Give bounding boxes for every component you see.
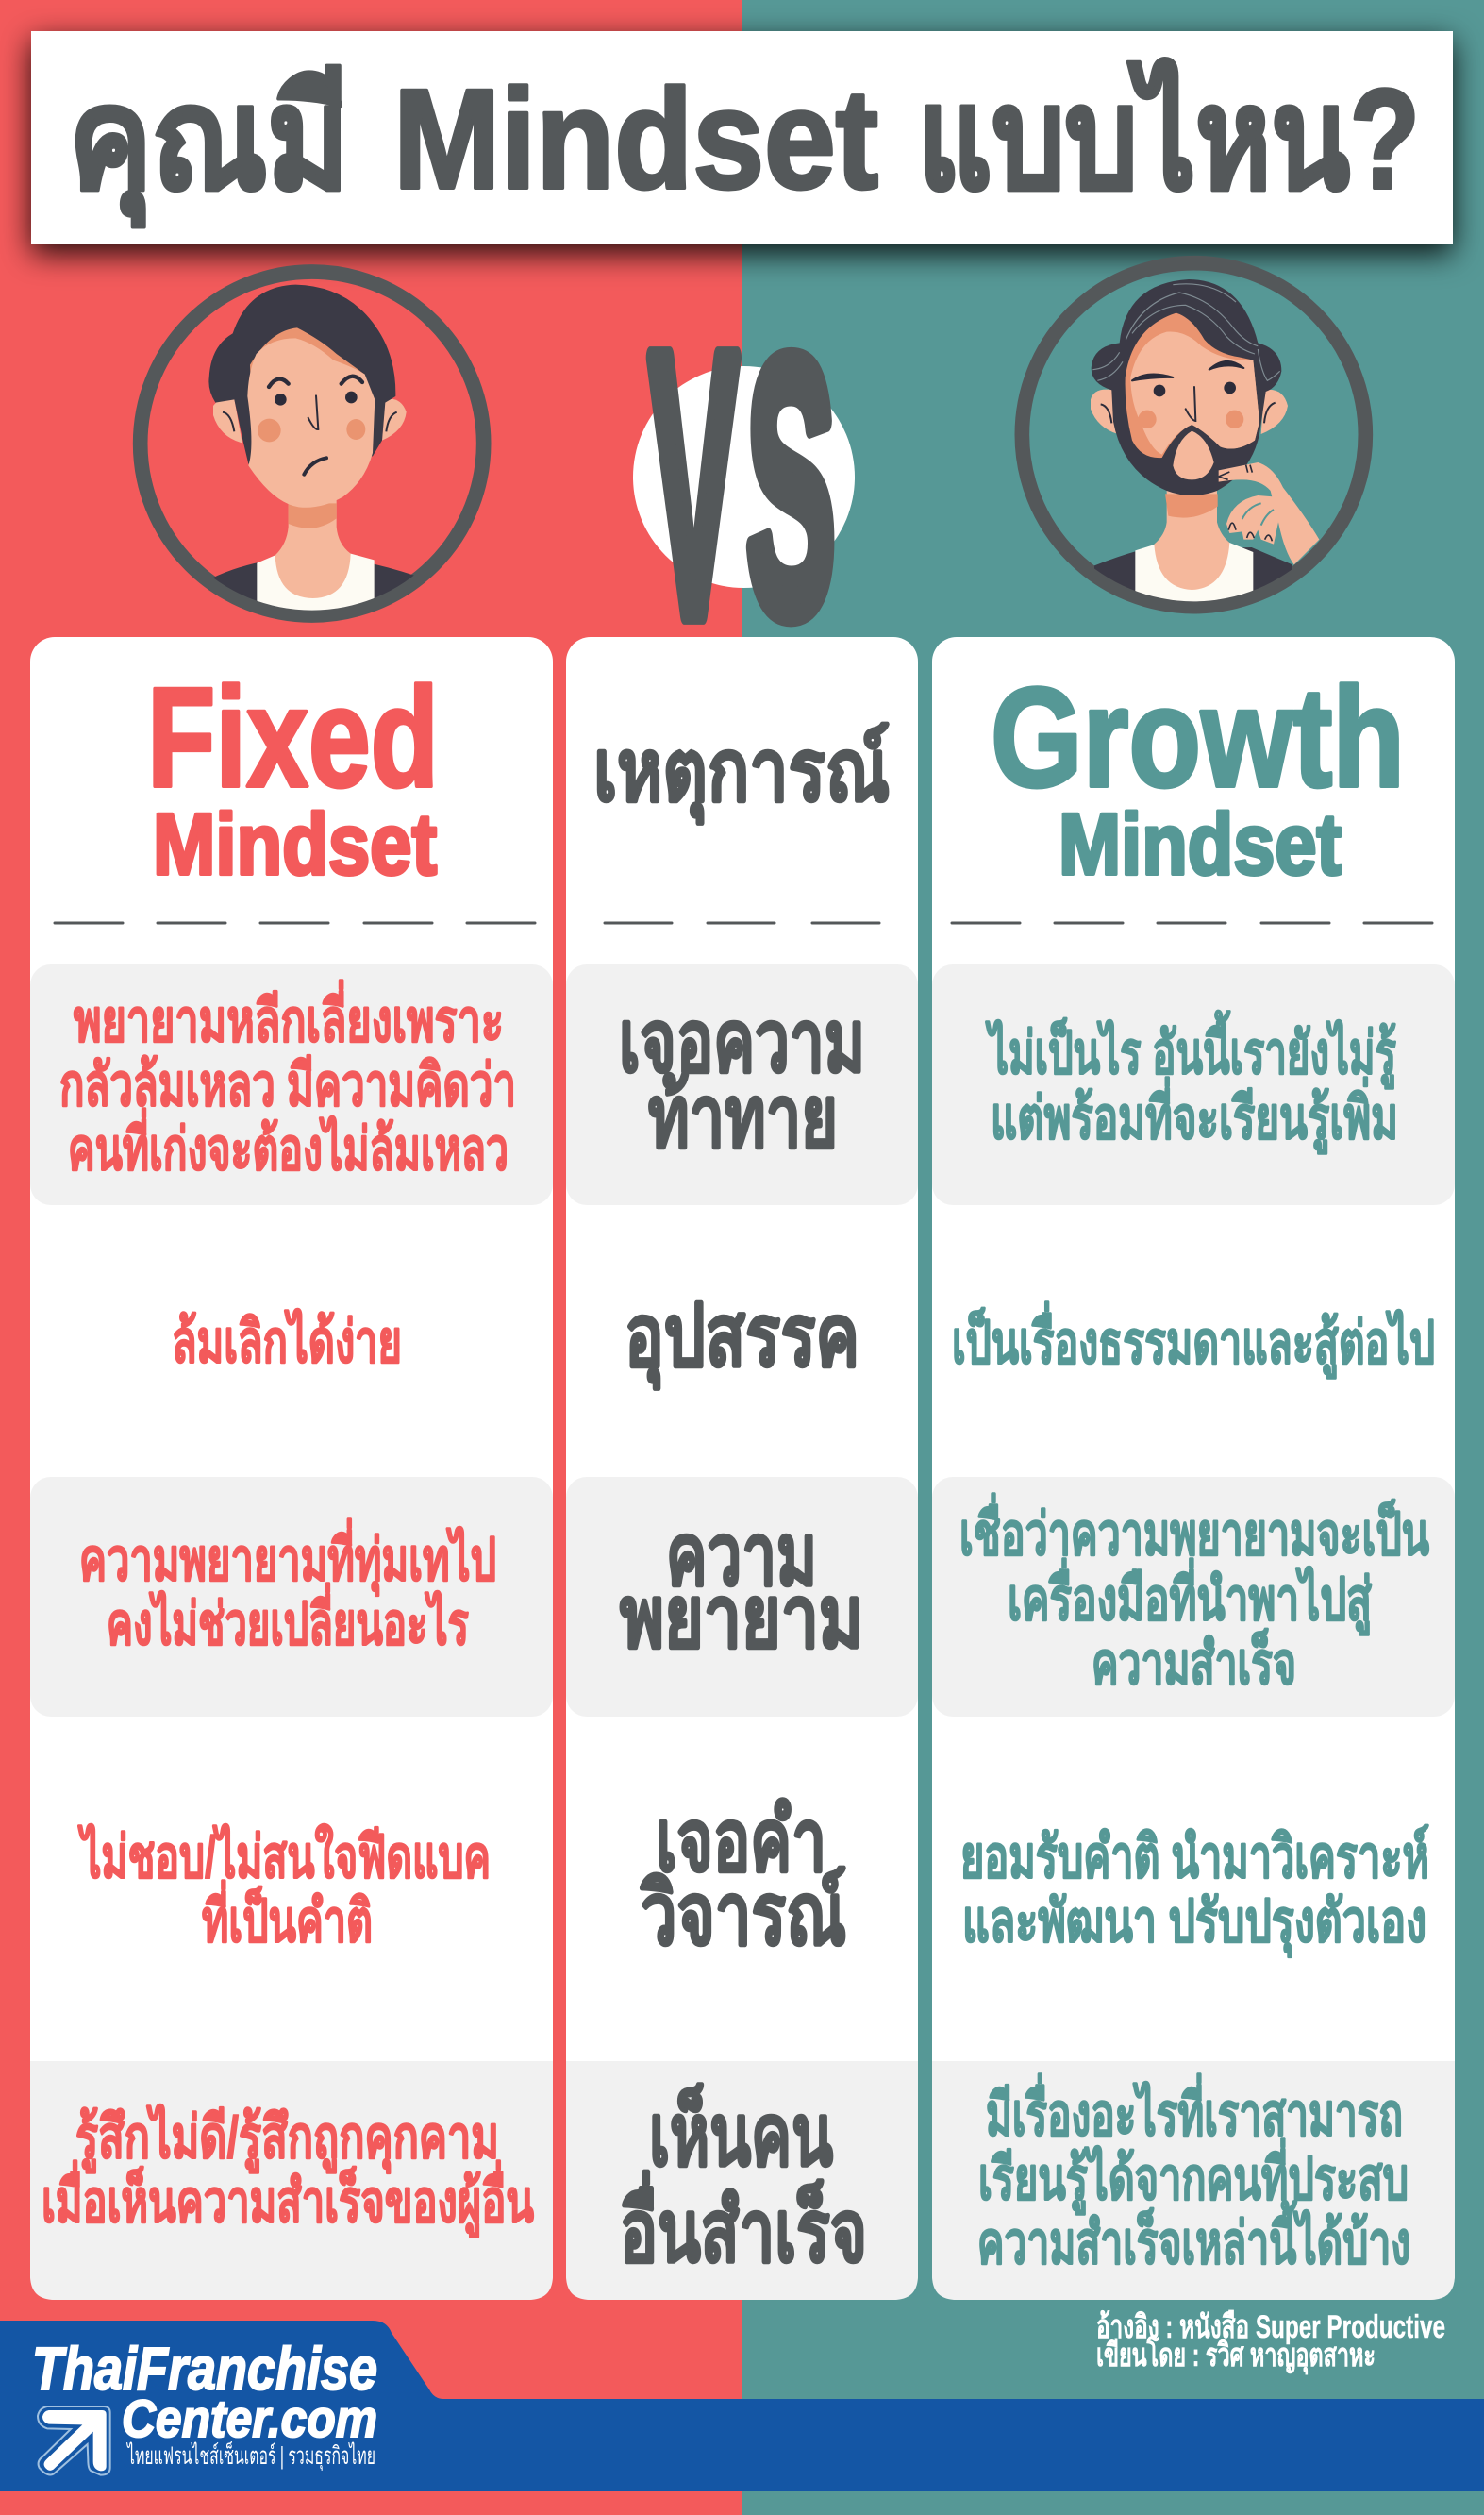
row: criticism, growth response (960, 1824, 1429, 1957)
row: success of others: อื่นสำเร็จ (620, 2170, 867, 2280)
row: success of others (566, 2061, 918, 2300)
row: criticism: วิจารณ์ (640, 1866, 846, 1963)
row: success of others, fixed response: รู้สึกไม่ดี/รู้สึกถูกคุกคาม (75, 2104, 499, 2173)
title text (69, 59, 1420, 227)
heading: Growth Mindset: Growth (991, 658, 1405, 816)
logo: ThaiFranchise Center.com (32, 2335, 377, 2475)
row: challenge (566, 964, 918, 1205)
VS text (649, 277, 836, 693)
row: criticism, fixed response: ที่เป็นคำติ (202, 1880, 373, 1954)
row: effort: พยายาม (620, 1569, 863, 1666)
heading: Fixed Mindset (147, 658, 439, 893)
row: success of others, fixed response (30, 2061, 553, 2300)
heading: Growth Mindset: Mindset (1059, 796, 1342, 893)
panel: Fixed Mindset column (30, 637, 553, 2300)
row: challenge: เจอความ (619, 994, 865, 1090)
row: challenge, fixed response (30, 964, 553, 1205)
heading: Fixed Mindset: Fixed (147, 658, 439, 816)
panel: Growth Mindset column (932, 637, 1455, 2300)
row: challenge: ท้าทาย (648, 1069, 838, 1165)
row: criticism, fixed response (77, 1823, 491, 1954)
row: effort: ความ (666, 1507, 817, 1603)
logo: ThaiFranchise Center.com: ไทยแฟรนไชส์เซ็นเตอร์ | รวมธุรกิจไทย (126, 2440, 375, 2471)
credits (1096, 2309, 1445, 2375)
VS badge (633, 277, 855, 693)
row: effort, fixed response (30, 1477, 553, 1717)
logo: ThaiFranchise Center.com: ThaiFranchise (32, 2335, 377, 2403)
row: criticism, fixed response: ไม่ชอบ/ไม่สนใจฟีดแบค (77, 1823, 491, 1890)
logo: ThaiFranchise Center.com: Center.com (122, 2389, 377, 2448)
title text: คุณมี (69, 59, 349, 227)
heading: Fixed Mindset: Mindset (153, 796, 437, 893)
row: challenge, fixed response: คนที่เก่งจะต้องไม่ล้มเหลว (68, 1108, 509, 1182)
VS text: V (649, 277, 739, 693)
row: challenge, growth response (932, 964, 1455, 1205)
row: effort (566, 1477, 918, 1717)
title banner (31, 31, 1453, 244)
row: criticism: เจอคำ (656, 1793, 826, 1889)
heading: Growth Mindset (991, 658, 1405, 893)
row: challenge, fixed response: พยายามหลีกเลี่ยงเพราะ (74, 980, 504, 1054)
icon: up-right arrow (38, 2406, 110, 2475)
row: success of others, growth response (932, 2061, 1455, 2300)
row: success of others, fixed response: เมื่อเห็นความสำเร็จของผู้อื่น (42, 2160, 534, 2238)
footer band with logo tab (0, 2321, 1484, 2491)
row: criticism (640, 1793, 846, 1963)
row: effort, growth response: ความสำเร็จ (1092, 1628, 1296, 1697)
heading: situation: เหตุการณ์ (593, 722, 890, 825)
VS text: S (746, 283, 836, 690)
title text: Mindset (393, 59, 878, 218)
icon: worried man portrait (141, 272, 484, 639)
row: success of others: เห็นคน (649, 2083, 833, 2184)
icon: bearded man portrait (1022, 263, 1365, 623)
panel: situation column (566, 637, 918, 2300)
row: obstacle: อุปสรรค (625, 1288, 859, 1390)
row: obstacle, fixed response: ล้มเลิกได้ง่าย (172, 1308, 402, 1375)
row: challenge, fixed response: กลัวล้มเหลว มีความคิดว่า (59, 1053, 516, 1118)
row: effort, growth response (932, 1477, 1455, 1717)
row: effort, fixed response: คงไม่ช่วยเปลี่ยนอะไร (107, 1583, 469, 1657)
row: effort, fixed response: ความพยายามที่ทุ่มเทไป (79, 1518, 496, 1596)
